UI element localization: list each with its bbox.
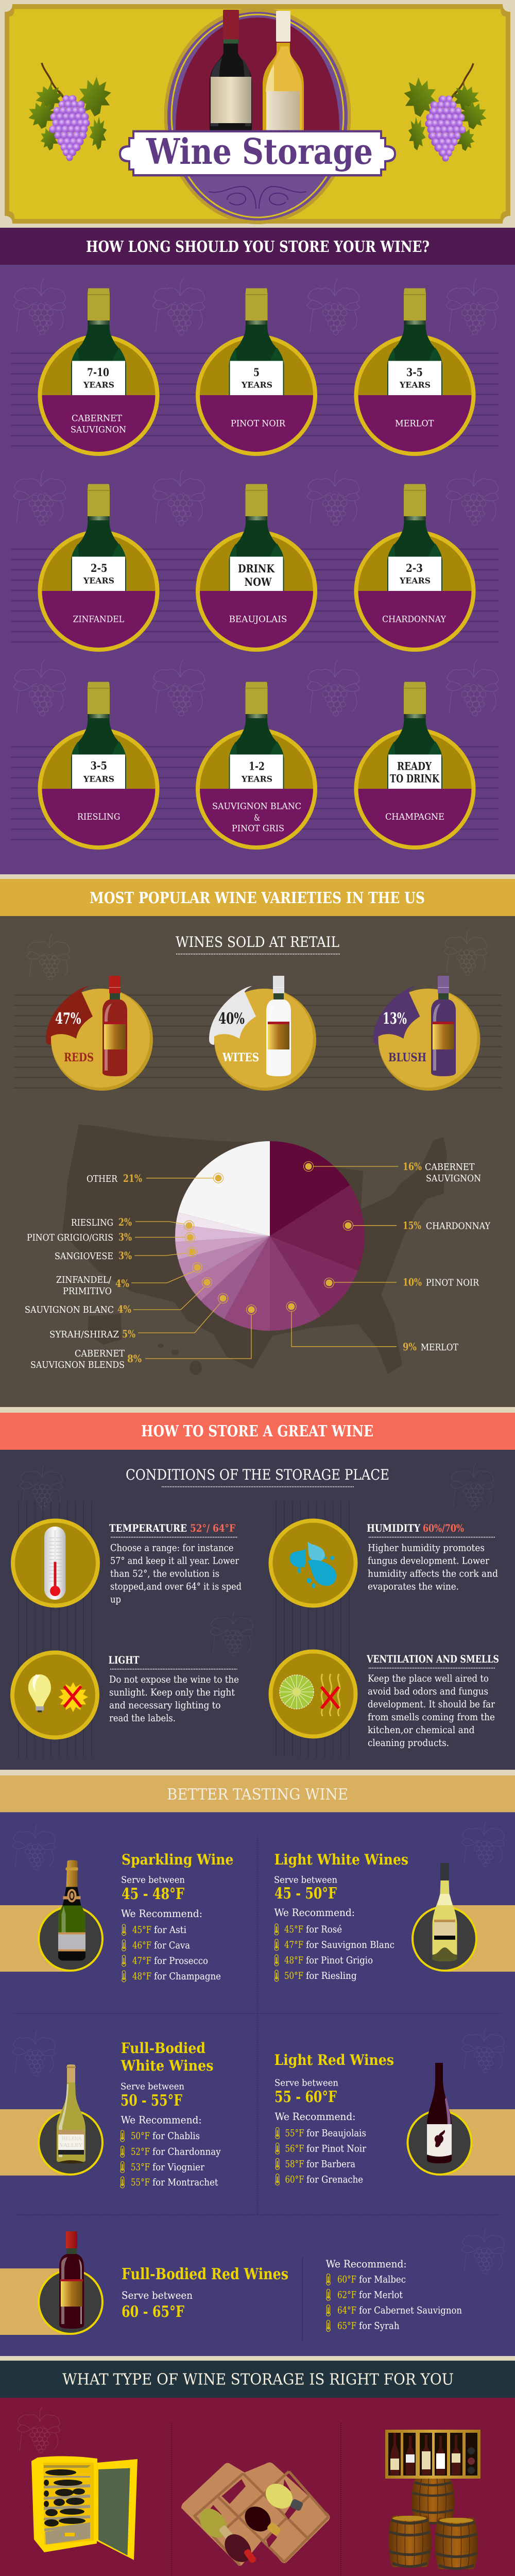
card: sauvignon blanc and pinot gris: PINOT GRIS xyxy=(232,824,284,834)
card: light white wines: for Pinot Grigio xyxy=(306,1955,373,1966)
sub-heading: wines sold at retail: WINES SOLD AT RETAIL xyxy=(176,934,339,951)
card: zinfandel: ZINFANDEL xyxy=(73,615,124,625)
block: humidity: fungus development. Lower xyxy=(368,1556,489,1566)
pie labels left: 21% xyxy=(123,1172,142,1184)
section heading: what type of wine storage xyxy=(0,2361,515,2398)
central oval medallion xyxy=(164,8,351,224)
retail: whites 40% xyxy=(209,976,316,1091)
card: sparkling wine: Serve between xyxy=(121,1874,185,1886)
retail: blush 13%: BLUSH xyxy=(388,1051,426,1064)
card: merlot: YEARS xyxy=(399,380,431,389)
card: light red wines xyxy=(274,2052,515,2185)
card: cabernet sauvignon: YEARS xyxy=(83,380,114,389)
card: riesling: YEARS xyxy=(83,774,114,784)
pie labels left: SAUVIGNON BLENDS xyxy=(30,1360,125,1370)
card: light red wines: We Recommend: xyxy=(275,2110,355,2123)
card: light white wines: for Rosé xyxy=(306,1924,342,1935)
card: full-bodied white wines: for Viognier xyxy=(152,2162,204,2173)
pie markers xyxy=(184,1161,353,1315)
card: chardonnay: 2-3 xyxy=(406,562,423,574)
block: humidity: HUMIDITY xyxy=(367,1522,421,1534)
panel: serving temperatures xyxy=(0,1812,515,2356)
block: light: LIGHT xyxy=(108,1654,140,1666)
card: sparkling wine: for Cava xyxy=(154,1940,190,1951)
grape bunch left xyxy=(28,63,111,161)
block: humidity: Higher humidity promotes xyxy=(368,1543,485,1554)
panel: wine varieties xyxy=(0,916,515,1407)
card: sauvignon blanc and pinot gris: YEARS xyxy=(241,774,272,784)
block: temperature: up xyxy=(110,1594,121,1605)
block: humidity: evaporates the wine. xyxy=(368,1582,459,1592)
card: light white wines: Serve between xyxy=(274,1874,337,1886)
card: full-bodied white wines: White Wines xyxy=(121,2057,213,2074)
card: cabernet sauvignon: 7-10 xyxy=(87,366,109,379)
card: sauvignon blanc and pinot gris xyxy=(196,682,317,850)
pie labels left: RIESLING xyxy=(71,1217,113,1228)
card: sauvignon blanc and pinot gris: SAUVIGNON BLANC xyxy=(212,802,301,812)
card: full-bodied white wines: 50°F xyxy=(131,2131,150,2142)
card: full-bodied red wines: 65°F xyxy=(337,2320,356,2332)
block: humidity: 60%/70% xyxy=(423,1522,464,1534)
card: zinfandel xyxy=(38,484,160,652)
card: pinot noir: YEARS xyxy=(241,380,272,389)
card: light white wines: 47°F xyxy=(284,1940,303,1951)
card: full-bodied red wines: 60 - 65°F xyxy=(122,2303,184,2321)
pie labels left: SANGIOVESE xyxy=(55,1251,113,1262)
card: light red wines: 60°F xyxy=(285,2174,304,2185)
card: full-bodied red wines xyxy=(0,2231,462,2335)
card: merlot: MERLOT xyxy=(395,419,434,429)
retail: reds 47%: REDS xyxy=(64,1051,94,1064)
card: full-bodied red wines: 60°F xyxy=(337,2274,356,2285)
section heading: better tasting wine xyxy=(0,1775,515,1812)
pie labels right: CABERNET xyxy=(425,1162,475,1173)
block: temperature xyxy=(109,1522,242,1605)
card: full-bodied white wines: for Chablis xyxy=(152,2131,200,2142)
title banner xyxy=(119,130,396,176)
card: full-bodied white wines: 50 - 55°F xyxy=(121,2092,182,2110)
card: light white wines: 45 - 50°F xyxy=(274,1885,337,1903)
card: full-bodied white wines: 53°F xyxy=(131,2162,150,2173)
section heading: how to store a great wine: HOW TO STORE A GREAT WINE xyxy=(141,1422,373,1440)
card: sparkling wine: We Recommend: xyxy=(121,1907,202,1920)
card: sauvignon blanc and pinot gris: 1-2 xyxy=(249,759,265,773)
card: sparkling wine: for Asti xyxy=(154,1925,186,1936)
card: light red wines: for Pinot Noir xyxy=(306,2143,366,2154)
section heading: how long should you store your wine: HOW LONG SHOULD YOU STORE YOUR WINE? xyxy=(86,238,430,256)
card: champagne: TO DRINK xyxy=(390,772,440,785)
card: cabernet sauvignon: SAUVIGNON xyxy=(71,425,126,435)
card: light red wines: 55 - 60°F xyxy=(274,2088,337,2106)
card: chardonnay: YEARS xyxy=(399,576,431,586)
card: sparkling wine: for Prosecco xyxy=(154,1956,208,1967)
block: ventilation and smells: cleaning products. xyxy=(368,1738,449,1749)
panel: storage durations xyxy=(0,265,515,874)
pie labels left: PRIMITIVO xyxy=(63,1286,112,1297)
retail: reds 47%: 47% xyxy=(55,1010,81,1028)
card: light white wines: for Riesling xyxy=(306,1971,357,1981)
card: pinot noir xyxy=(196,289,317,456)
card: full-bodied red wines: for Merlot xyxy=(359,2290,403,2300)
block: temperature: 52°/ 64°F xyxy=(190,1522,235,1534)
pie labels right: CHARDONNAY xyxy=(426,1221,490,1232)
block: ventilation and smells: VENTILATION AND SMELLS xyxy=(366,1653,499,1665)
card: full-bodied white wines: We Recommend: xyxy=(121,2114,202,2126)
card: full-bodied red wines: for Malbec xyxy=(359,2274,406,2285)
card: sparkling wine: Sparkling Wine xyxy=(122,1851,234,1868)
block: humidity: humidity affects the cork and xyxy=(368,1568,498,1580)
card: riesling: 3-5 xyxy=(91,759,107,772)
icon: thermometer xyxy=(13,1521,98,1605)
card: sparkling wine: 46°F xyxy=(132,1940,151,1951)
card: full-bodied red wines: 64°F xyxy=(337,2306,356,2316)
card: chardonnay: CHARDONNAY xyxy=(382,615,447,625)
card: champagne: CHAMPAGNE xyxy=(385,812,444,822)
pie labels right: 15% xyxy=(403,1219,421,1232)
block: ventilation and smells: kitchen,or chemical and xyxy=(368,1725,475,1736)
card: full-bodied white wines xyxy=(0,2040,221,2188)
card: beaujolais: DRINK xyxy=(238,562,275,575)
section heading: most popular wine varieties: MOST POPULAR WINE VARIETIES IN THE US xyxy=(90,889,425,907)
ornamental swirl xyxy=(209,187,306,209)
card: sauvignon blanc and pinot gris: & xyxy=(254,813,260,823)
block: light: read the labels. xyxy=(109,1713,176,1724)
card: full-bodied red wines: for Cabernet Sauvignon xyxy=(359,2306,462,2316)
card: light white wines: We Recommend: xyxy=(274,1906,355,1919)
card: champagne xyxy=(354,682,476,850)
card: riesling xyxy=(38,682,160,850)
white wine bottle xyxy=(263,11,304,130)
card: full-bodied red wines: Serve between xyxy=(122,2289,193,2301)
pie labels left: OTHER xyxy=(87,1174,118,1184)
card: light white wines: 45°F xyxy=(284,1924,303,1935)
red wine bottle xyxy=(210,10,252,130)
card: beaujolais xyxy=(196,484,317,652)
block: temperature: than 52°, the evolution is xyxy=(110,1568,219,1580)
retail: blush 13% xyxy=(373,976,480,1091)
card: full-bodied white wines: Serve between xyxy=(121,2081,184,2092)
card: pinot noir: PINOT NOIR xyxy=(231,419,286,429)
pie labels left: SYRAH/SHIRAZ xyxy=(49,1329,119,1340)
panel: storage types xyxy=(0,2398,515,2576)
card: beaujolais: BEAUJOLAIS xyxy=(229,615,287,625)
block: ventilation and smells: Keep the place well aired to xyxy=(368,1673,489,1684)
card: sparkling wine: 45°F xyxy=(132,1925,151,1936)
block: ventilation and smells: from smells coming from the xyxy=(368,1712,495,1723)
illustration: wine fridge xyxy=(31,2456,138,2560)
pie chart xyxy=(175,1141,365,1331)
pie labels left: ZINFANDEL/ xyxy=(56,1275,112,1285)
block: temperature: Choose a range: for instance xyxy=(110,1543,234,1554)
retail: whites 40%: 40% xyxy=(218,1010,245,1028)
block: temperature: TEMPERATURE xyxy=(109,1522,187,1534)
card: zinfandel: YEARS xyxy=(83,576,114,586)
illustration: wine cellar xyxy=(385,2430,480,2569)
card: sparkling wine: 47°F xyxy=(132,1956,151,1967)
block: temperature: stopped,and over 64° it is sped xyxy=(110,1582,242,1592)
card: riesling: RIESLING xyxy=(77,812,120,822)
card: light red wines: for Beaujolais xyxy=(306,2128,366,2139)
block: light: and necessary lighting to xyxy=(109,1700,221,1711)
pie labels left: 5% xyxy=(122,1328,135,1340)
card: light red wines: Serve between xyxy=(274,2078,338,2089)
card: zinfandel: 2-5 xyxy=(91,562,107,574)
card: sparkling wine: 45 - 48°F xyxy=(122,1885,184,1903)
card: pinot noir: 5 xyxy=(253,366,260,379)
block: ventilation and smells: avoid bad odors and fungus xyxy=(368,1686,488,1697)
sub-heading: conditions: CONDITIONS OF THE STORAGE PLACE xyxy=(126,1466,389,1483)
pie labels left: PINOT GRIGIO/GRIS xyxy=(27,1232,113,1243)
card: light white wines: 50°F xyxy=(284,1971,303,1981)
card: light red wines: 58°F xyxy=(285,2159,304,2170)
pie labels left: 3% xyxy=(118,1231,132,1243)
card: sparkling wine: 48°F xyxy=(132,1971,151,1982)
card: light white wines: Light White Wines xyxy=(274,1851,408,1868)
card: light red wines: 56°F xyxy=(285,2143,304,2154)
retail: reds 47% xyxy=(46,976,153,1091)
card: full-bodied white wines: for Montrachet xyxy=(152,2177,218,2188)
pie labels right: MERLOT xyxy=(421,1342,458,1353)
retail: blush 13%: 13% xyxy=(383,1010,407,1028)
block: ventilation and smells xyxy=(366,1653,499,1749)
card: full-bodied red wines: 62°F xyxy=(337,2290,356,2300)
block: light xyxy=(108,1654,239,1724)
illustration: wine rack xyxy=(181,2463,330,2567)
pie labels left: 4% xyxy=(117,1303,131,1315)
background grape pattern row 1 xyxy=(13,279,499,716)
block: light: sunlight. Keep only the right xyxy=(109,1687,235,1698)
pie labels left: SAUVIGNON BLANC xyxy=(25,1304,114,1315)
map of the US xyxy=(62,1125,447,1375)
pie labels right xyxy=(403,1160,490,1353)
card: light white wines xyxy=(274,1851,515,1981)
card: champagne: READY xyxy=(397,759,432,773)
pie labels left: 8% xyxy=(127,1352,142,1365)
card: full-bodied white wines: 52°F xyxy=(131,2146,150,2158)
section heading: how long should you store your wine xyxy=(0,228,515,265)
card: full-bodied red wines: Full-Bodied Red Wines xyxy=(122,2265,288,2283)
section heading: what type of wine storage: WHAT TYPE OF WINE STORAGE IS RIGHT FOR YOU xyxy=(62,2371,454,2389)
card: chardonnay xyxy=(354,484,476,652)
card: light red wines: for Grenache xyxy=(306,2174,363,2185)
icon: light bulb and sun xyxy=(12,1653,97,1737)
title text: Wine Storage xyxy=(146,131,373,173)
pie labels right: PINOT NOIR xyxy=(426,1278,479,1289)
card: light white wines: 48°F xyxy=(284,1955,303,1966)
section heading: better tasting wine: BETTER TASTING WINE xyxy=(167,1786,348,1804)
card: cabernet sauvignon: CABERNET xyxy=(72,414,123,424)
pie labels right: 16% xyxy=(403,1160,422,1173)
block: light: Do not expose the wine to the xyxy=(109,1674,239,1685)
grape bunch right xyxy=(404,63,487,162)
header: wine storage xyxy=(5,4,510,224)
card: beaujolais: NOW xyxy=(244,575,272,588)
card: light red wines: 55°F xyxy=(285,2128,304,2139)
card: full-bodied white wines: 55°F xyxy=(131,2177,150,2188)
pie labels left: 4% xyxy=(115,1277,129,1290)
card: light red wines: for Barbera xyxy=(306,2159,355,2170)
header frame xyxy=(5,4,510,224)
pie labels right: 10% xyxy=(403,1276,422,1289)
pie labels right: 9% xyxy=(403,1341,417,1353)
pie labels right: SAUVIGNON xyxy=(426,1173,481,1184)
card: sparkling wine xyxy=(0,1851,234,1982)
card: full-bodied white wines: for Chardonnay xyxy=(152,2146,221,2158)
card: merlot: 3-5 xyxy=(406,366,423,379)
section heading: how to store a great wine xyxy=(0,1413,515,1450)
block: humidity xyxy=(367,1522,498,1592)
block: temperature: 57° and keep it all year. Lower xyxy=(110,1556,239,1566)
pie labels left xyxy=(25,1172,142,1370)
card: sparkling wine: for Champagne xyxy=(154,1971,221,1982)
card: merlot xyxy=(354,289,476,456)
card: light white wines: for Sauvignon Blanc xyxy=(306,1940,394,1951)
panel: conditions of the storage place xyxy=(0,1450,515,1770)
card: light red wines: Light Red Wines xyxy=(274,2052,394,2069)
pie labels left: CABERNET xyxy=(75,1348,125,1359)
pie leader lines xyxy=(131,1166,398,1359)
card: full-bodied red wines: for Syrah xyxy=(359,2320,400,2332)
card: cabernet sauvignon xyxy=(38,289,160,456)
block: ventilation and smells: development. It should be far xyxy=(368,1699,495,1710)
pie labels left: 3% xyxy=(118,1249,132,1262)
icon: fan and smells xyxy=(271,1652,355,1736)
section heading: most popular wine varieties xyxy=(0,879,515,916)
retail: whites 40%: WITES xyxy=(222,1051,259,1064)
card: full-bodied red wines: We Recommend: xyxy=(326,2258,407,2270)
card: full-bodied white wines: Full-Bodied xyxy=(121,2040,205,2057)
icon: water drops xyxy=(271,1521,355,1605)
pie labels left: 2% xyxy=(118,1216,132,1228)
